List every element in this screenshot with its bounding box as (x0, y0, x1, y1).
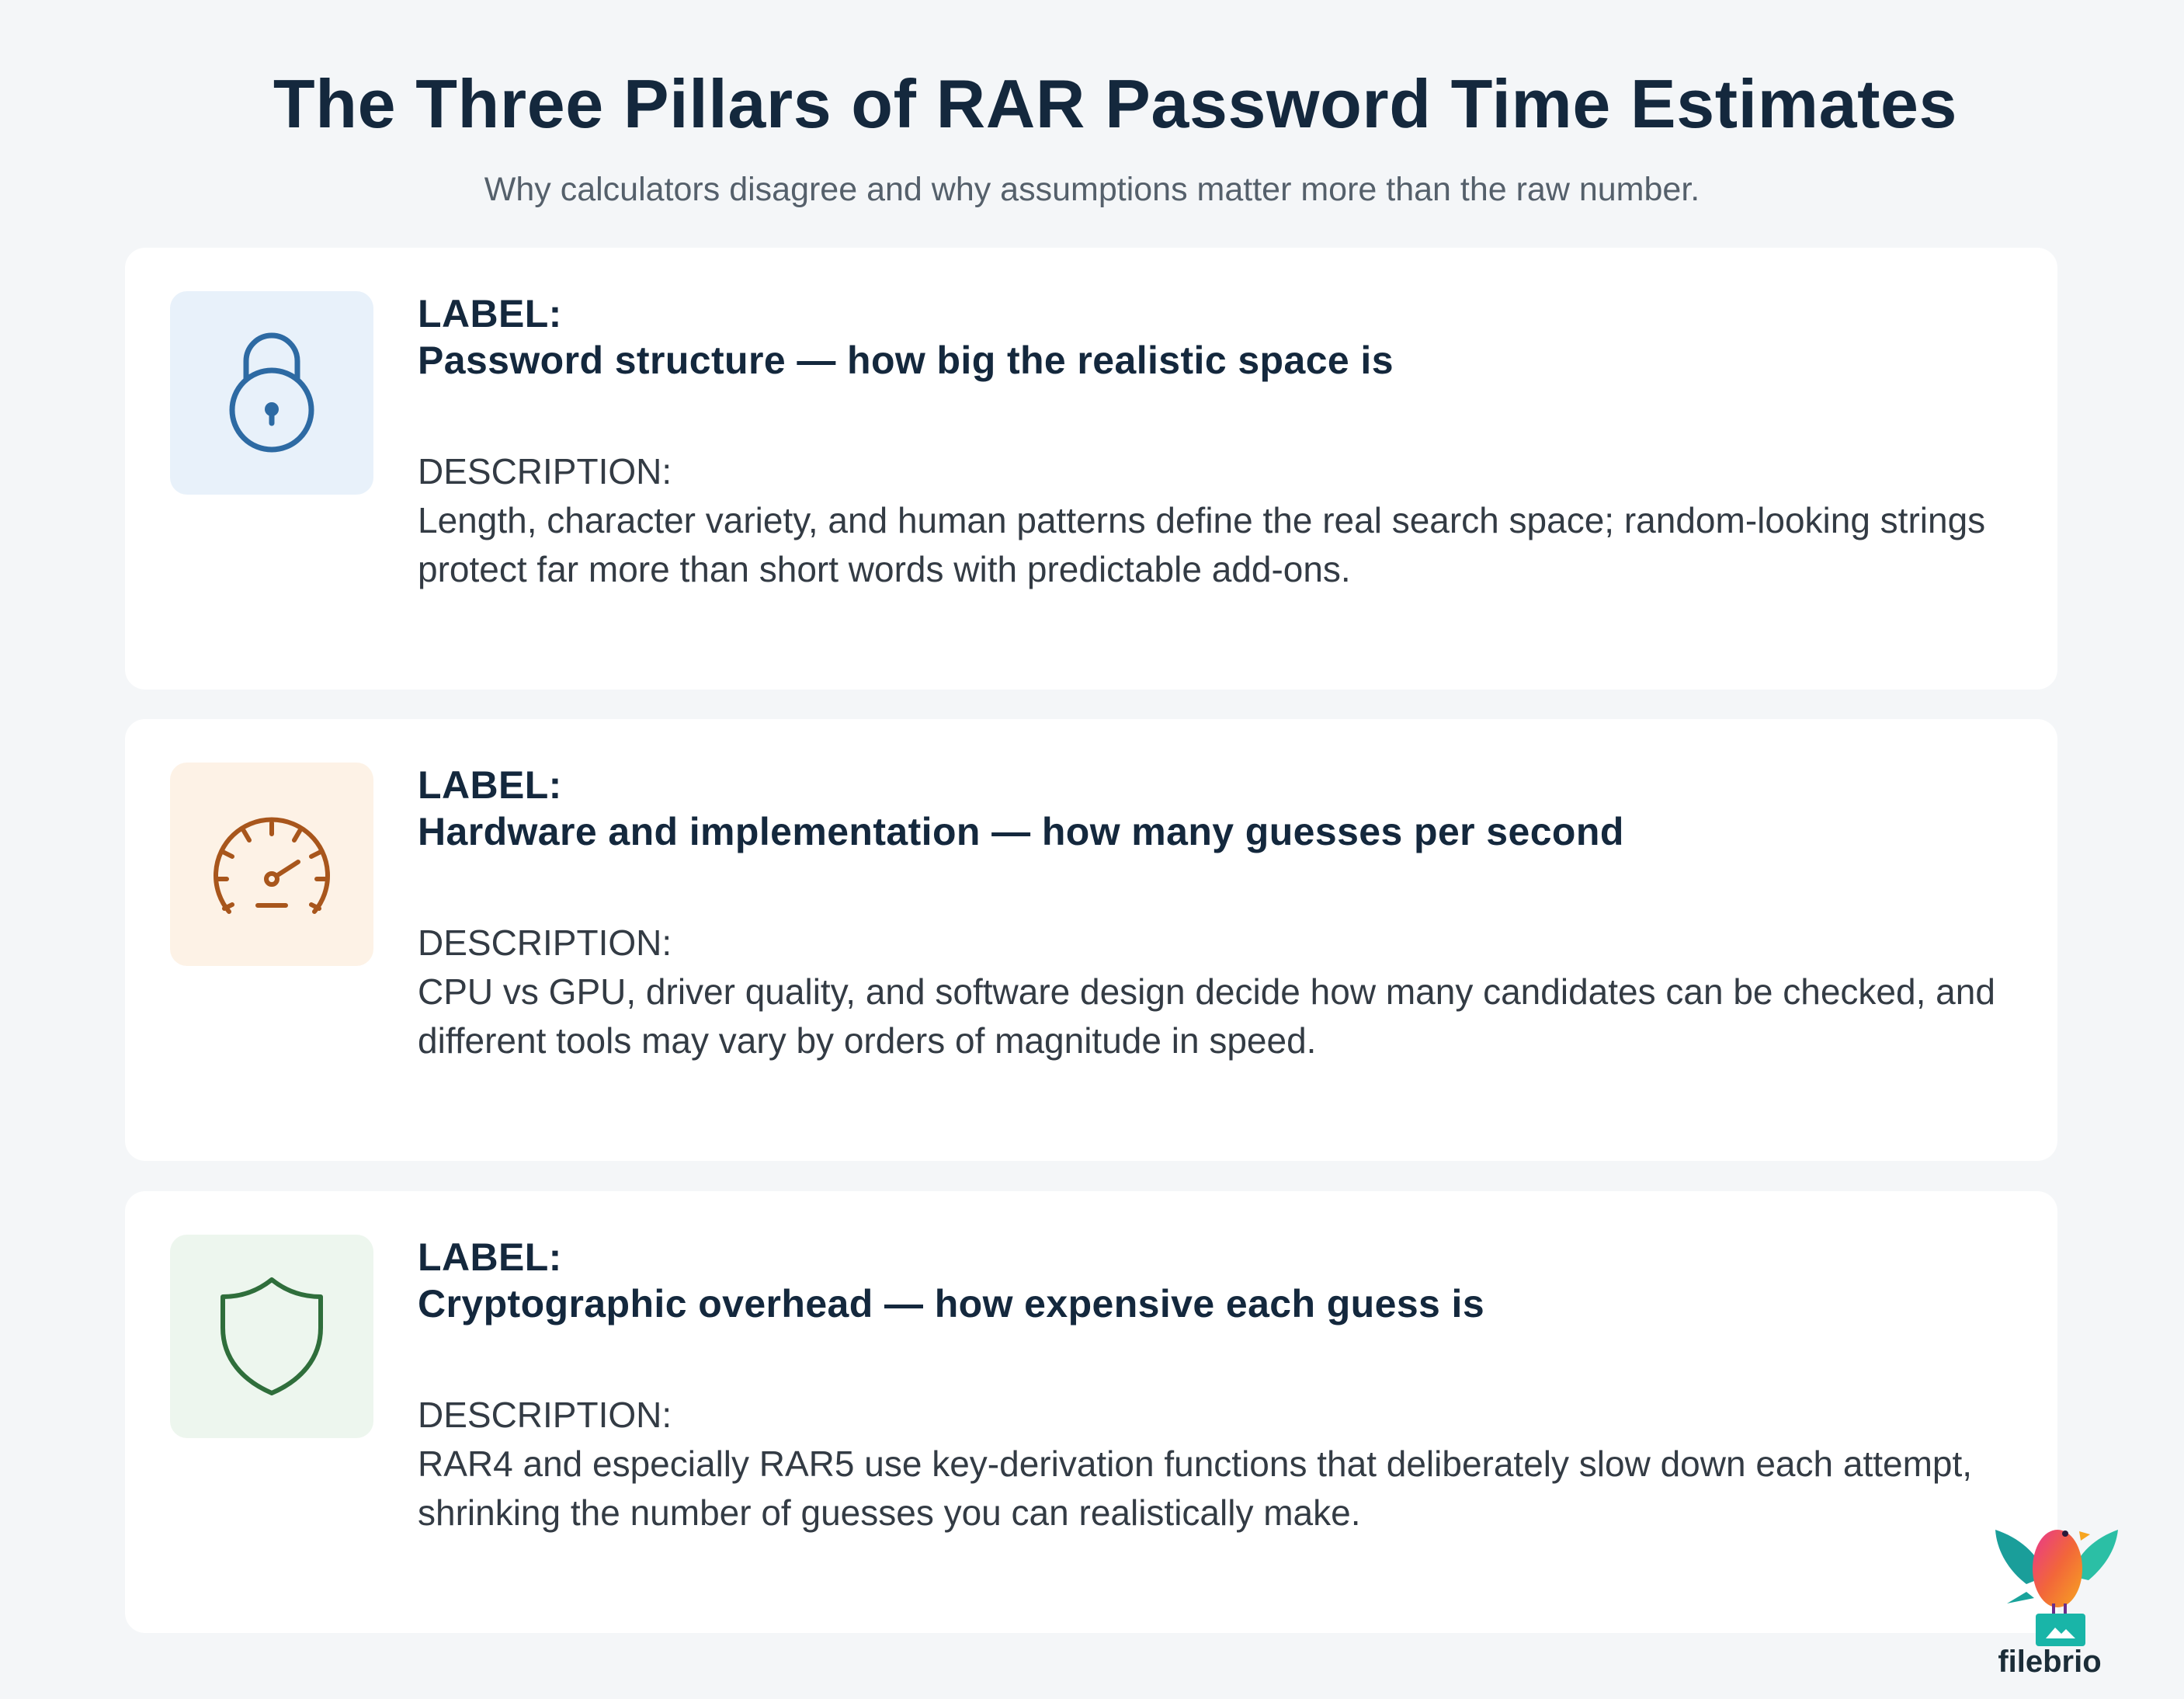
text block: LABEL: (418, 763, 562, 807)
text block: CPU vs GPU, driver quality, and software design decide how many candidates can be checked, and (418, 971, 1995, 1012)
text block: LABEL: (418, 1235, 562, 1279)
text block: Cryptographic overhead — how expensive each guess is (418, 1282, 1484, 1325)
subtitle: Why calculators disagree and why assumptions matter more than the raw number. (484, 171, 1700, 208)
logo: filebrio (1995, 1530, 2118, 1679)
text block: different tools may vary by orders of magnitude in speed. (418, 1020, 1316, 1061)
text block: DESCRIPTION: (418, 1395, 672, 1435)
panel: password structure (125, 248, 2057, 690)
icon: gauge (170, 763, 373, 966)
text block (418, 1235, 1972, 1533)
text block: Password structure — how big the realistic space is (418, 339, 1394, 382)
logo: filebrio: filebrio (1998, 1645, 2102, 1679)
text block: shrinking the number of guesses you can realistically make. (418, 1492, 1360, 1533)
text block: DESCRIPTION: (418, 451, 672, 492)
panel: hardware (125, 719, 2057, 1161)
text block: LABEL: (418, 292, 562, 335)
text block (418, 292, 1985, 589)
panel: crypto (125, 1191, 2057, 1633)
icon: lock (170, 291, 373, 495)
text block: Length, character variety, and human patterns define the real search space; random-looking strings (418, 500, 1985, 540)
title: The Three Pillars of RAR Password Time Estimates (273, 65, 1957, 142)
text block: Hardware and implementation — how many guesses per second (418, 810, 1624, 853)
icon: shield (170, 1235, 373, 1438)
text block: protect far more than short words with predictable add-ons. (418, 549, 1351, 589)
text block: RAR4 and especially RAR5 use key-derivation functions that deliberately slow down each attempt, (418, 1444, 1972, 1484)
text block (418, 763, 1995, 1061)
text block: DESCRIPTION: (418, 922, 672, 963)
